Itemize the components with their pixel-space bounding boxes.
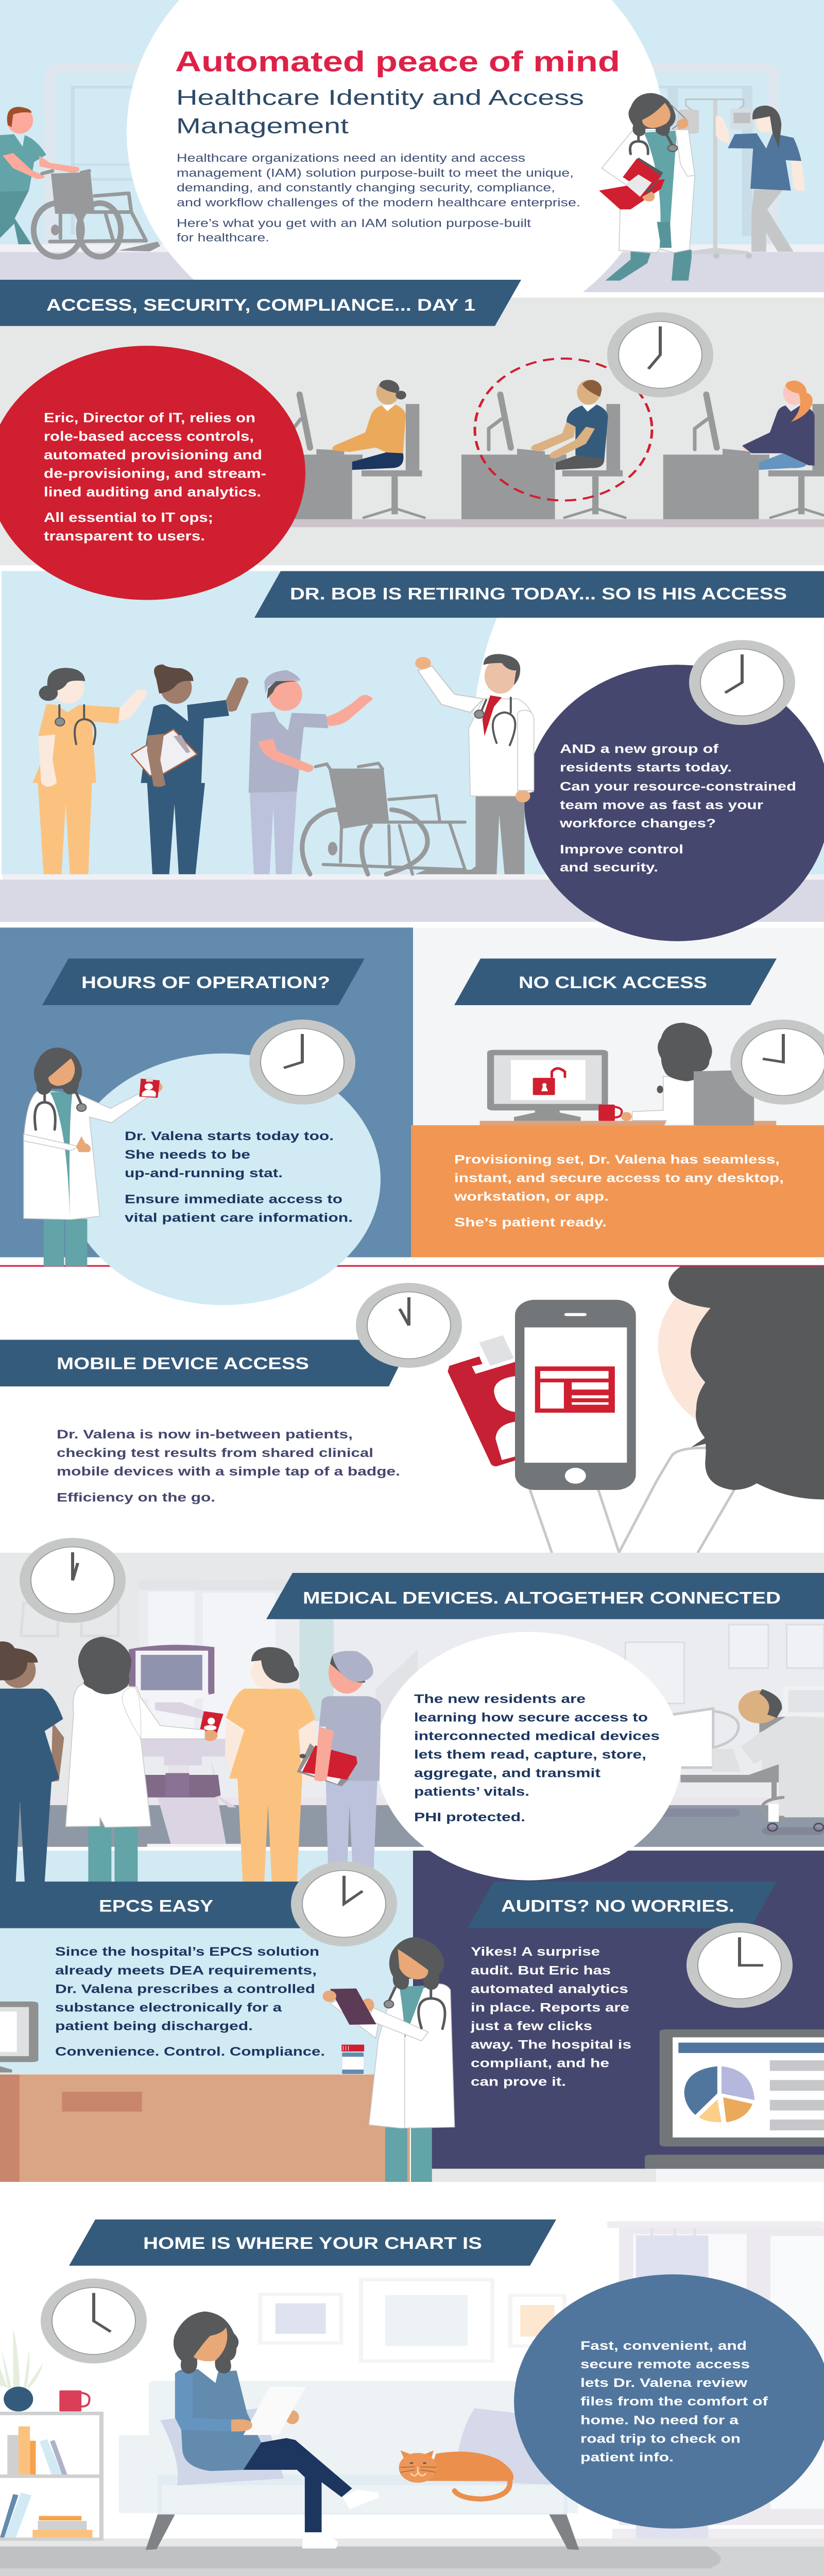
illustration: badge, phone and doctor close-up	[448, 1266, 824, 1552]
illustration: Dr. Valena on sofa	[174, 2312, 380, 2549]
illustration: monitor with open lock	[480, 1050, 776, 1125]
white text circle	[376, 1632, 682, 1880]
panel: hours of operation and no click access	[0, 927, 824, 1305]
illustration: wheelchair	[302, 764, 496, 874]
panel: mobile device access	[0, 1266, 824, 1552]
text: home: files from the comfort of	[580, 2394, 768, 2409]
panel: EPCS easy and audits	[0, 1861, 824, 2182]
text: EPCS easy: Dr. Valena prescribes a controlled	[55, 1981, 315, 1996]
text: medical devices: PHI protected.	[414, 1810, 525, 1824]
text: hours of operation: up-and-running stat.	[125, 1166, 283, 1180]
text: Dr. Bob: team move as fast as your	[560, 798, 763, 812]
text: Dr. Bob: workforce changes?	[559, 816, 716, 830]
clock	[291, 1861, 397, 1946]
banner: no click access	[454, 958, 777, 1005]
text: hours of operation: vital patient care information.	[125, 1210, 353, 1225]
intro text: Here’s what you get with an IAM solution purpose-built	[177, 217, 531, 230]
text: audits: audit. But Eric has	[471, 1963, 611, 1977]
banner: home: HOME IS WHERE YOUR CHART IS	[143, 2234, 482, 2252]
illustration: Dr. Bob waving	[415, 654, 534, 874]
text: Dr. Bob: Can your resource-constrained	[560, 779, 796, 793]
illustration: living room	[0, 2221, 824, 2576]
dark text circle	[524, 665, 824, 941]
intro text: and workflow challenges of the modern healthcare enterprise.	[177, 196, 580, 209]
intro text	[177, 152, 580, 244]
text: Dr. Bob	[559, 742, 796, 874]
subtitle: Management	[176, 114, 349, 138]
text: Dr. Bob: AND a new group of	[560, 742, 719, 756]
text: no click access: workstation, or app.	[454, 1190, 609, 1204]
text: audits: compliant, and he	[471, 2056, 609, 2070]
intro text: demanding, and constantly changing security, compliance,	[177, 181, 555, 194]
text: mobile device access: Efficiency on the go.	[57, 1490, 215, 1504]
illustration: staff waving goodbye	[32, 665, 373, 874]
illustration: laptop with pie chart	[645, 2029, 824, 2168]
text: EPCS easy: patient being discharged.	[55, 2019, 253, 2033]
banner: audits	[468, 1882, 777, 1928]
illustration: desk, monitor and medicine bottle	[0, 2002, 410, 2182]
text: Dr. Bob: residents starts today.	[560, 760, 732, 774]
illustration: office workstations	[289, 380, 824, 527]
banner: audits: AUDITS? NO WORRIES.	[501, 1896, 734, 1916]
text: EPCS easy: already meets DEA requirements,	[55, 1963, 317, 1977]
callout: red circle with Eric text: automated provisioning and	[44, 448, 262, 463]
illustration: patient in bed	[673, 1686, 824, 1831]
clock	[607, 312, 713, 397]
text: mobile device access	[57, 1427, 400, 1504]
text: hours of operation: Ensure immediate access to	[125, 1192, 342, 1206]
subtitle	[176, 85, 584, 138]
title: Automated peace of mind	[175, 46, 620, 78]
banner: EPCS easy: EPCS EASY	[99, 1896, 213, 1916]
text: hours of operation: She needs to be	[125, 1147, 250, 1161]
text: mobile device access: Dr. Valena is now in-between patients,	[57, 1427, 353, 1441]
text: Dr. Bob: and security.	[560, 860, 658, 874]
callout: red circle with Eric text: de-provisioning, and stream-	[44, 466, 266, 481]
intro text: for healthcare.	[177, 231, 269, 244]
clock	[730, 1020, 824, 1105]
text: mobile device access: mobile devices with a simple tap of a badge.	[57, 1464, 400, 1478]
clock	[41, 2279, 147, 2364]
illustration: IV stand and nurse	[678, 98, 805, 259]
text: EPCS easy: substance electronically for a	[55, 2000, 282, 2014]
illustration: hospital room background	[16, 1580, 824, 1851]
dashed highlight circle	[475, 359, 652, 500]
panel backgrounds: EPCS and audits	[0, 1851, 824, 2182]
text: no click access	[454, 1152, 784, 1229]
text: audits: can prove it.	[471, 2074, 566, 2089]
clock	[249, 1020, 355, 1105]
panel: Dr. Bob retiring	[0, 571, 824, 941]
clock	[20, 1538, 126, 1623]
clock	[356, 1283, 462, 1368]
banner: mobile device access: MOBILE DEVICE ACCESS	[57, 1354, 309, 1372]
panel: hero	[0, 0, 824, 355]
banner: Dr. Bob	[254, 571, 824, 618]
text: medical devices: The new residents are	[414, 1691, 586, 1706]
text: medical devices: patients’ vitals.	[414, 1784, 529, 1799]
clock	[689, 640, 795, 725]
subtitle: Healthcare Identity and Access	[176, 85, 584, 109]
banner: medical devices: MEDICAL DEVICES. ALTOGETHER CONNECTED	[303, 1588, 781, 1607]
intro text: Healthcare organizations need an identity and access	[177, 152, 525, 164]
panel: day 1 access	[0, 280, 824, 600]
text: medical devices: learning how secure access to	[414, 1710, 648, 1724]
text: mobile device access: checking test results from shared clinical	[57, 1446, 373, 1460]
text: hours of operation	[125, 1129, 353, 1225]
callout: red circle with Eric text: role-based access controls,	[44, 429, 254, 444]
text: EPCS easy	[55, 1944, 325, 2058]
banner: Dr. Bob: DR. BOB IS RETIRING TODAY... SO IS HIS ACCESS	[290, 585, 787, 603]
text: medical devices	[414, 1691, 660, 1824]
text: medical devices: aggregate, and transmit	[414, 1766, 600, 1780]
text: home	[580, 2338, 768, 2464]
banner: medical devices	[266, 1573, 824, 1619]
callout: red circle with Eric text: lined auditing and analytics.	[44, 485, 261, 500]
text: no click access: She’s patient ready.	[454, 1215, 607, 1229]
text: medical devices: interconnected medical devices	[414, 1728, 660, 1743]
text: no click access: instant, and secure access to any desktop,	[454, 1171, 784, 1185]
illustration: Dr. Valena holding badge	[24, 1047, 162, 1266]
intro text: management (IAM) solution purpose-built to meet the unique,	[177, 166, 574, 179]
illustration: doctor with red folder	[599, 93, 695, 281]
illustration: bookshelf, plant and mug	[0, 2328, 104, 2541]
clock	[686, 1923, 793, 2008]
text: home: secure remote access	[580, 2357, 750, 2371]
illustration: doctor at workstation	[621, 1023, 754, 1125]
blue text circle	[514, 2275, 824, 2529]
banner: no click access: NO CLICK ACCESS	[519, 973, 707, 992]
banner: hours of operation: HOURS OF OPERATION?	[81, 973, 330, 992]
banner: mobile device access	[0, 1340, 412, 1386]
banner: day 1: ACCESS, SECURITY, COMPLIANCE... DAY 1	[46, 296, 475, 314]
text: audits: automated analytics	[471, 1981, 628, 1996]
banner: home	[69, 2219, 556, 2266]
callout: red circle with Eric text: All essential to IT ops;	[44, 511, 213, 525]
illustration: residents at the bedside	[0, 1637, 381, 1882]
banner: EPCS easy	[0, 1882, 330, 1928]
illustration: orange cat	[399, 2450, 513, 2499]
blob: light blue text circle	[66, 1054, 381, 1305]
text: home: patient info.	[580, 2450, 674, 2464]
text: EPCS easy: Convenience. Control. Compliance.	[55, 2044, 325, 2058]
callout: red circle with Eric text: transparent to users.	[44, 529, 205, 544]
banner: hours of operation	[42, 958, 365, 1005]
callout: red circle with Eric text: Eric, Director of IT, relies on	[44, 411, 255, 426]
illustration: Dr. Valena with tablet	[323, 1937, 455, 2182]
callout: red circle with Eric text	[0, 346, 305, 600]
text: audits	[470, 1944, 631, 2089]
illustration: nurse pushing wheelchair	[0, 107, 160, 257]
text: medical devices: lets them read, capture, store,	[414, 1747, 646, 1761]
banner: day 1	[0, 280, 521, 326]
panel: home is where your chart is	[0, 2219, 824, 2576]
text: audits: away. The hospital is	[471, 2037, 631, 2052]
text: home: lets Dr. Valena review	[580, 2376, 748, 2389]
illustration: ultrasound machine	[129, 1645, 236, 1844]
text: audits: just a few clicks	[470, 2019, 592, 2033]
text: EPCS easy: Since the hospital’s EPCS solution	[55, 1944, 319, 1959]
text: home: Fast, convenient, and	[580, 2338, 747, 2352]
text: home: home. No need for a	[580, 2413, 739, 2427]
text: audits: in place. Reports are	[471, 2000, 629, 2014]
text: no click access: Provisioning set, Dr. Valena has seamless,	[454, 1152, 780, 1166]
panel: medical devices	[0, 1538, 824, 1882]
text: home: road trip to check on	[580, 2431, 741, 2446]
text: hours of operation: Dr. Valena starts today too.	[125, 1129, 334, 1143]
text: Dr. Bob: Improve control	[560, 842, 683, 856]
text: audits: Yikes! A surprise	[471, 1944, 600, 1959]
